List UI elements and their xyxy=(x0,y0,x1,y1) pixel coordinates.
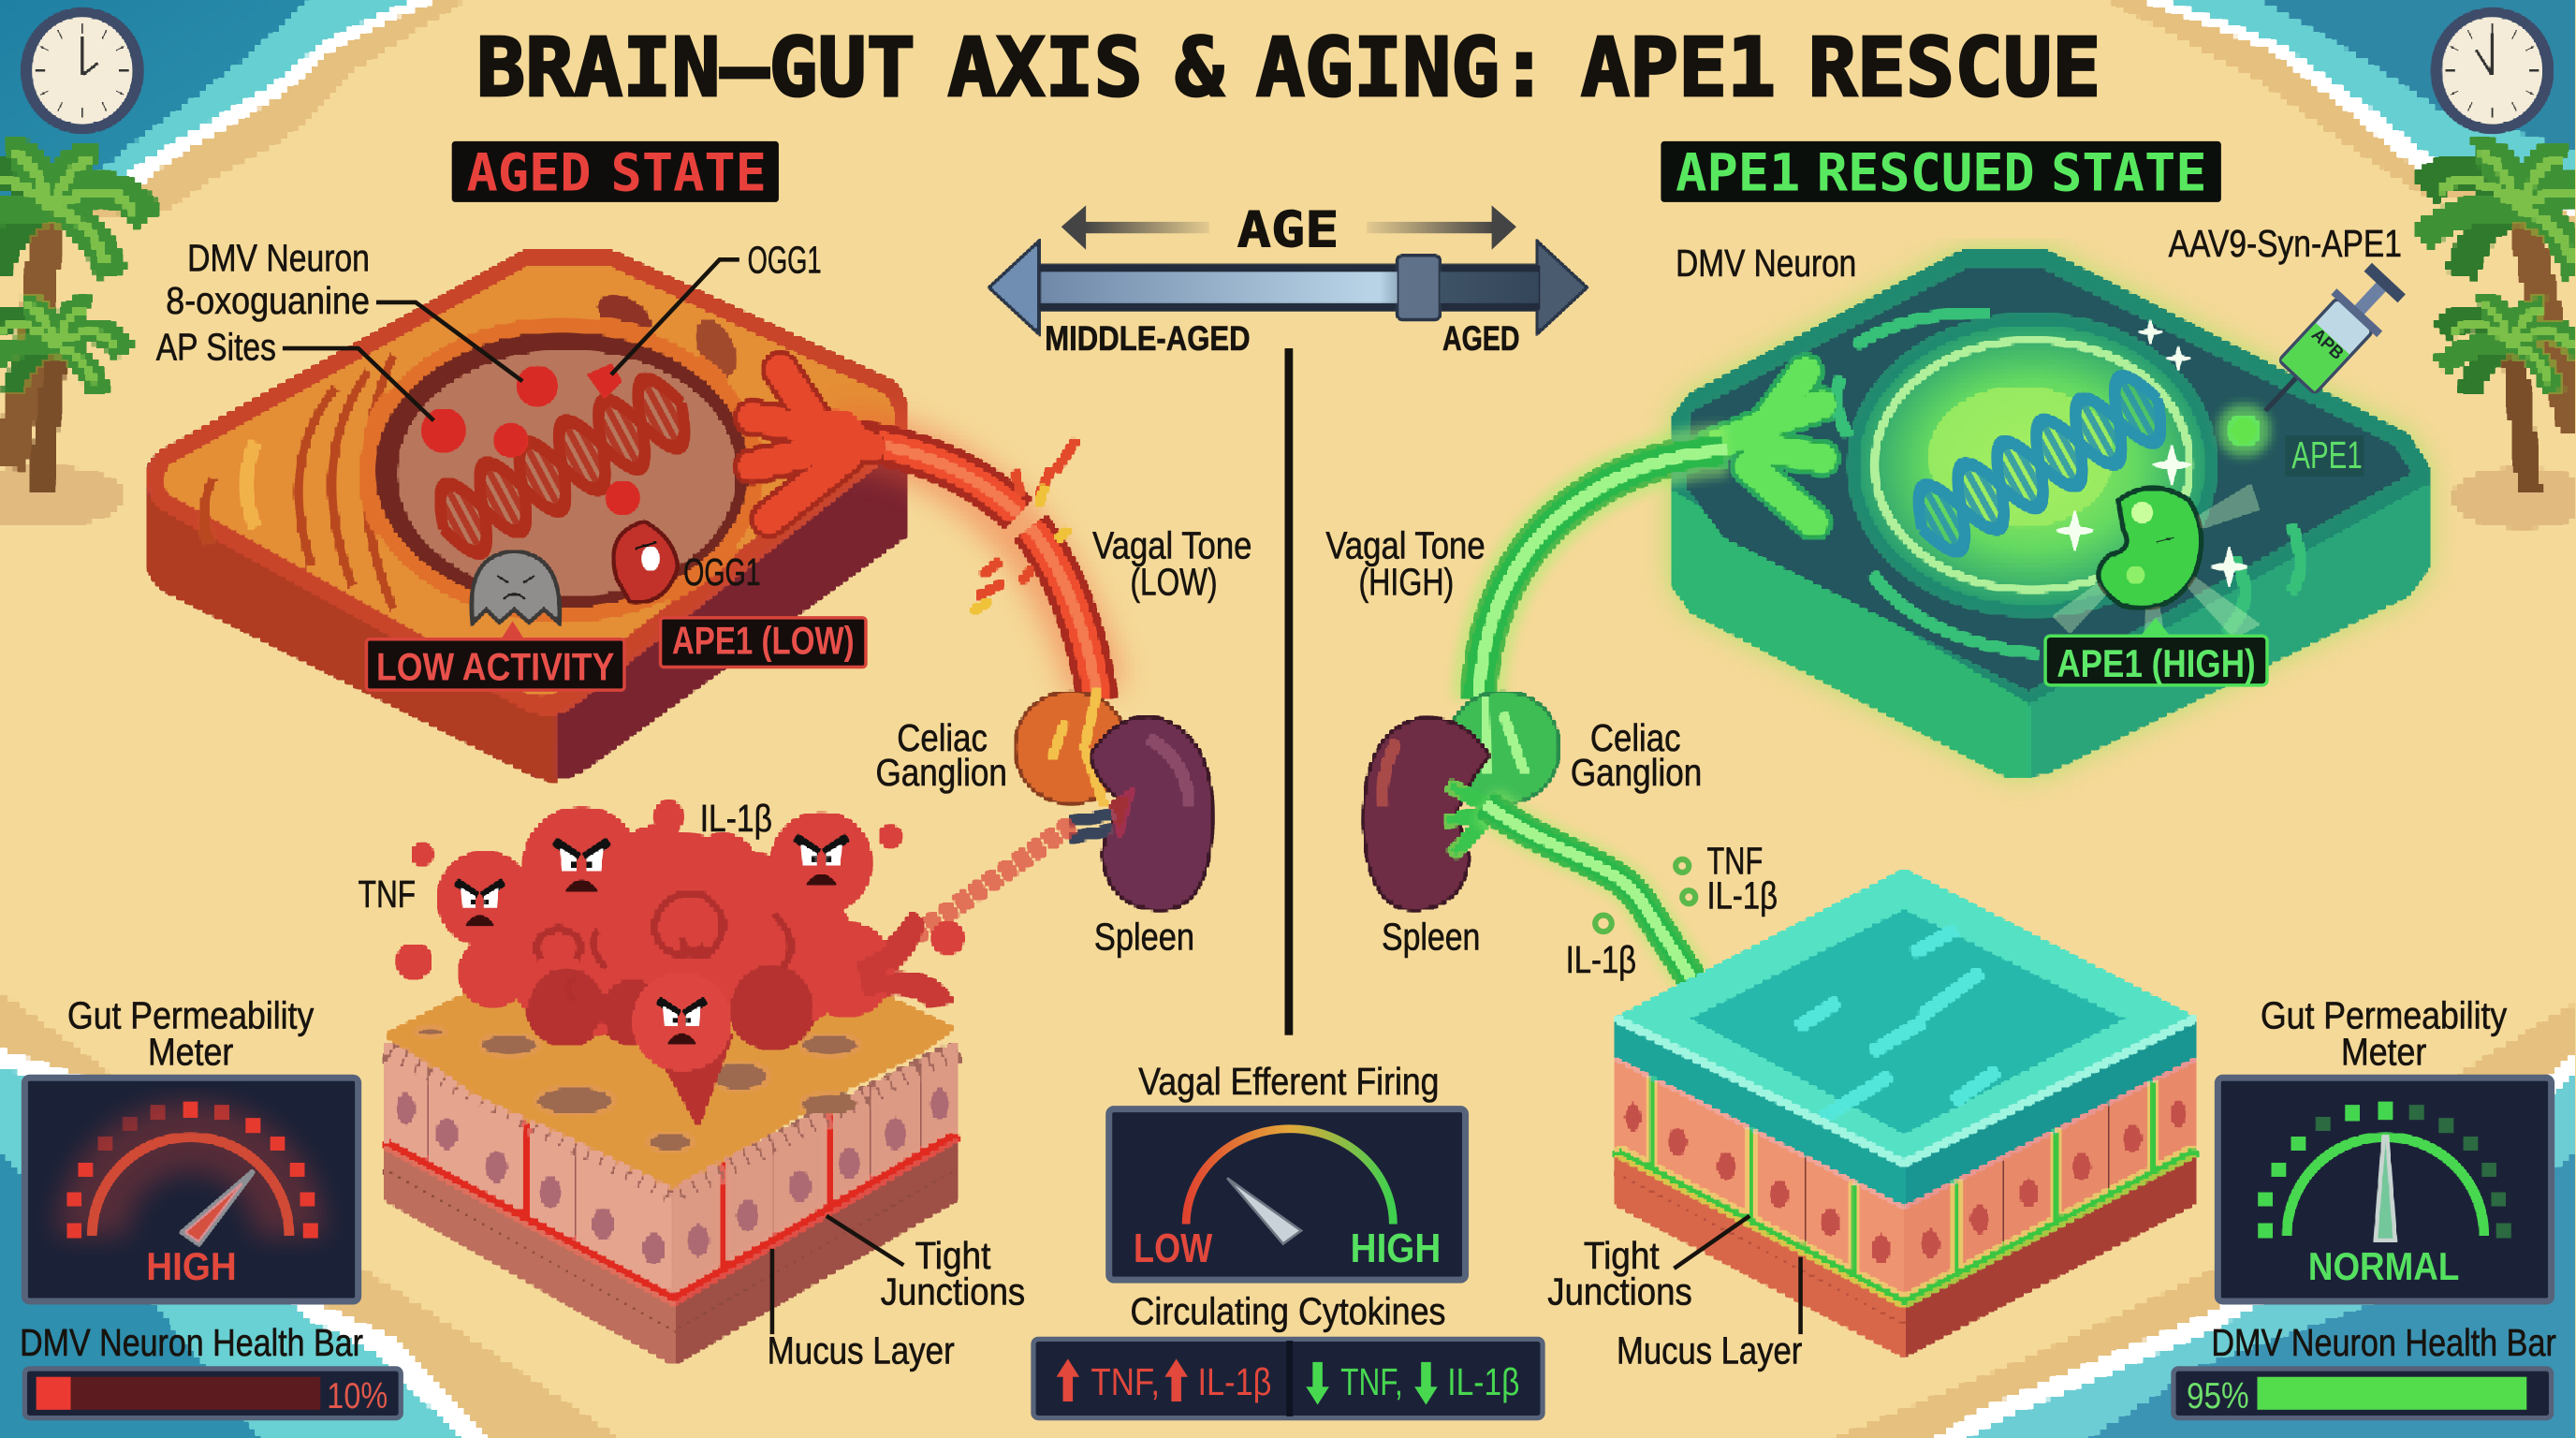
needle xyxy=(1227,1178,1301,1244)
tag: low activity: LOW ACTIVITY xyxy=(376,645,614,689)
label: celiac ganglion left xyxy=(875,716,1007,794)
palm trees right xyxy=(2422,155,2576,493)
gauge arc xyxy=(1186,1129,1393,1224)
frame xyxy=(24,1078,359,1301)
frame xyxy=(1033,1339,1543,1418)
reading: NORMAL xyxy=(2308,1244,2459,1288)
arrow: toward middle-aged xyxy=(1061,205,1209,250)
label: AP sites: AP Sites xyxy=(156,325,276,368)
nerve to gut xyxy=(1486,805,1692,979)
axon xyxy=(1479,450,1725,698)
small cytokines xyxy=(1595,859,1695,932)
frame xyxy=(1109,1109,1466,1280)
center divider xyxy=(1284,348,1293,1035)
enzyme light rays xyxy=(2054,485,2259,649)
label: mucus layer right: Mucus Layer xyxy=(1617,1329,1802,1372)
celiac ganglion right xyxy=(1449,694,1558,801)
up arrows and aged values: TNF, xyxy=(1090,1360,1160,1403)
label: tight junctions left xyxy=(827,1216,1025,1313)
label: middle-aged: MIDDLE-AGED xyxy=(1045,319,1251,358)
celiac ganglion left xyxy=(1017,690,1125,805)
label: tight junctions right: Junctions xyxy=(1547,1269,1692,1313)
icon: grey low-activity enzyme xyxy=(473,552,559,621)
icon: syringe xyxy=(2243,257,2411,432)
cell top surface xyxy=(1686,266,2415,694)
label: spleen left: Spleen xyxy=(1094,915,1194,958)
cell wall xyxy=(1673,252,2428,775)
leader lines aged cell xyxy=(283,259,739,420)
frayed mucus edge xyxy=(388,1051,956,1196)
down arrows and rescued values xyxy=(1306,1360,1519,1405)
damaged mucus top xyxy=(386,895,953,1190)
label: vagal tone high xyxy=(1325,524,1486,603)
icon: red OGG1 enzyme xyxy=(614,522,677,602)
label: DMV neuron rescued: DMV Neuron xyxy=(1676,242,1856,285)
label: IL-1beta left: IL-1β xyxy=(700,797,772,840)
panel: circulating cytokines xyxy=(1033,1290,1543,1418)
label xyxy=(67,994,315,1073)
droplet xyxy=(2219,405,2269,455)
mucus top lip xyxy=(1617,1019,1904,1208)
neuron and axon aged xyxy=(753,370,1097,698)
DNA and enzymes aged xyxy=(422,365,698,621)
label: TNF left: TNF xyxy=(359,873,416,916)
label: celiac ganglion right xyxy=(1571,716,1702,794)
label: APE1 in cell: APE1 xyxy=(2291,433,2363,477)
label: AAV9-Syn-APE1: AAV9-Syn-APE1 xyxy=(2169,222,2402,265)
epithelial cells xyxy=(386,1043,674,1298)
panel: inflamed gut tile xyxy=(386,895,956,1364)
up arrows and aged values xyxy=(1057,1358,1271,1403)
broken tight junctions xyxy=(526,1108,829,1270)
cell organelles xyxy=(204,353,575,666)
water: top-left shore xyxy=(0,0,463,230)
label: Circulating Cytokines xyxy=(1131,1290,1445,1333)
label: Vagal Efferent Firing xyxy=(1138,1060,1439,1103)
label: vagal tone low xyxy=(1092,524,1251,603)
label: OGG1 lower: OGG1 xyxy=(683,550,761,594)
label xyxy=(2261,994,2508,1073)
damage lesions xyxy=(422,365,639,514)
panel: health bar right xyxy=(2174,1321,2556,1418)
label: Meter xyxy=(2341,1030,2426,1073)
angry faces xyxy=(457,838,847,1043)
label: 8-oxoguanine: 8-oxoguanine xyxy=(166,279,370,322)
tight junctions xyxy=(1653,1078,2154,1275)
water: bottom-left shore xyxy=(0,994,616,1438)
label: Gut Permeability xyxy=(67,994,315,1037)
label: vagal tone low: (LOW) xyxy=(1131,560,1218,603)
frame xyxy=(2217,1078,2552,1301)
mucus layers xyxy=(386,1142,674,1364)
red cytokine cloud xyxy=(398,801,963,1123)
label: celiac ganglion right: Celiac xyxy=(1590,716,1680,759)
label: Meter xyxy=(148,1030,233,1073)
panel: gut permeability meter left xyxy=(24,994,359,1301)
label: OGG1 top: OGG1 xyxy=(748,238,822,281)
label: celiac ganglion right: Ganglion xyxy=(1571,751,1702,794)
low reading: LOW xyxy=(1134,1225,1213,1271)
red cytokine stream xyxy=(914,825,1071,936)
sparks xyxy=(977,440,1076,596)
label: vagal tone high: Vagal Tone xyxy=(1325,524,1486,567)
sand shadows under palms xyxy=(0,466,2576,527)
icon: clock right xyxy=(2431,8,2553,133)
up arrows and aged values: IL-1β xyxy=(1197,1360,1271,1403)
dendrite hand xyxy=(753,370,871,520)
label: vagal tone low: Vagal Tone xyxy=(1092,524,1251,567)
icon: clock left xyxy=(22,8,143,133)
DNA and APE1 enzyme rescued xyxy=(1905,320,2259,649)
gauge xyxy=(2259,1103,2510,1240)
label: tight junctions left: Junctions xyxy=(881,1269,1025,1313)
glow xyxy=(1673,252,2428,775)
label: tight junctions right xyxy=(1547,1216,1749,1313)
panel: rescued DMV neuron cell xyxy=(1479,252,2428,775)
DNA helix damaged xyxy=(426,370,698,563)
panel: health bar left xyxy=(20,1321,401,1418)
tag: APE1 low: APE1 (LOW) xyxy=(672,619,855,663)
water: top-right shore xyxy=(2110,0,2576,222)
heading: aged state: AGED STATE xyxy=(466,144,767,204)
nucleus glow xyxy=(1848,314,2217,616)
mucus layers xyxy=(1617,1151,1904,1356)
slider bar xyxy=(990,243,1586,332)
heading: APE1 rescued state: APE1 RESCUED STATE xyxy=(1676,144,2207,204)
label: IL-1beta right: IL-1β xyxy=(1707,874,1778,917)
DNA helix repaired xyxy=(1905,367,2174,561)
label: age: AGE xyxy=(1237,201,1339,258)
label: tight junctions right: Tight xyxy=(1584,1234,1660,1277)
label: vagal tone high: (HIGH) xyxy=(1358,560,1454,603)
panel: gut permeability meter right xyxy=(2217,994,2552,1301)
gauge xyxy=(67,1103,317,1244)
arrow: toward aged xyxy=(1367,205,1516,250)
spleen right xyxy=(1365,720,1486,909)
water: bottom-right shore xyxy=(1838,1004,2576,1438)
surface swirls xyxy=(1837,312,2300,654)
mucus top surface xyxy=(1617,871,2195,1164)
neuron hand xyxy=(1712,372,1822,522)
label: spleen right: Spleen xyxy=(1382,915,1480,958)
down arrows and rescued values: IL-1β xyxy=(1447,1360,1519,1403)
cell top surface xyxy=(148,252,907,714)
down arrows and rescued values: TNF, xyxy=(1340,1360,1403,1403)
epithelial cells xyxy=(1617,1060,1904,1301)
label: celiac ganglion left: Celiac xyxy=(897,716,988,759)
label: tight junctions left: Tight xyxy=(915,1234,990,1277)
panel: aged DMV neuron cell xyxy=(148,252,907,782)
tag: APE1 high xyxy=(2045,618,2267,685)
cell body wall xyxy=(148,252,907,778)
label: DMV neuron aged: DMV Neuron xyxy=(187,237,370,280)
panel: health bar left: DMV Neuron Health Bar xyxy=(20,1321,363,1364)
icon: syringe: APB xyxy=(2307,325,2348,364)
spleen left xyxy=(1071,718,1211,909)
nucleus xyxy=(359,315,766,624)
tag: APE1 high: APE1 (HIGH) xyxy=(2056,641,2256,685)
title: BRAIN–GUT AXIS & AGING: APE1 RESCUE xyxy=(476,22,2100,115)
palm trees left xyxy=(0,155,148,493)
reading: HIGH xyxy=(146,1244,237,1288)
sparkles xyxy=(2056,511,2095,550)
panel: healthy gut tile xyxy=(1617,871,2195,1356)
panel: health bar left: 10% xyxy=(327,1376,388,1416)
panel: health bar right: 95% xyxy=(2187,1376,2249,1416)
age scale xyxy=(990,201,1586,358)
particles xyxy=(398,801,963,977)
label: IL-1beta lower right: IL-1β xyxy=(1566,938,1636,981)
panel: vagal efferent firing xyxy=(1109,1060,1466,1280)
tag: low activity xyxy=(366,621,624,690)
high reading: HIGH xyxy=(1351,1225,1441,1271)
label: TNF right: TNF xyxy=(1707,840,1763,883)
label: Gut Permeability xyxy=(2261,994,2508,1037)
label: aged: AGED xyxy=(1442,319,1519,358)
label: mucus layer left: Mucus Layer xyxy=(768,1329,955,1372)
label: celiac ganglion left: Ganglion xyxy=(875,751,1007,794)
icon: APE1 enzyme xyxy=(2100,489,2201,608)
